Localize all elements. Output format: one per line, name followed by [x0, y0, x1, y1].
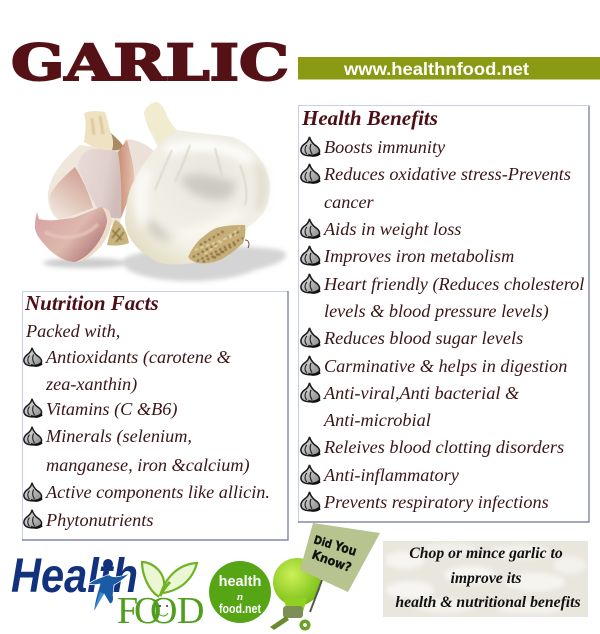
text: nutrition list	[24, 321, 270, 530]
text: benefits list: Releives blood clotting disorders	[323, 437, 564, 457]
text: benefits list	[301, 137, 584, 512]
logo badge: health n food.net	[209, 561, 271, 623]
logo badge: health n food.net: health	[219, 574, 261, 590]
text: nutrition list: Antioxidants (carotene &	[45, 347, 232, 368]
text: benefits list: cancer	[324, 192, 375, 212]
icon: light bulb with did you know sign	[270, 523, 380, 630]
text: nutrition list: Packed with,	[25, 321, 120, 341]
text: benefits list: Prevents respiratory infections	[323, 492, 549, 512]
heading: nutrition facts: Nutrition Facts	[24, 291, 159, 315]
callout: chop or mince tip: health & nutritional benefits	[395, 594, 581, 611]
callout: chop or mince tip	[383, 541, 588, 617]
callout: chop or mince tip: improve its	[450, 570, 522, 587]
icon: light bulb with did you know sign: Did You	[312, 532, 358, 560]
text: benefits list: Heart friendly (Reduces cholesterol	[323, 274, 584, 295]
text: benefits list: Anti-inflammatory	[323, 465, 460, 485]
panel: nutrition facts	[22, 291, 288, 540]
text: nutrition list: Phytonutrients	[45, 510, 153, 530]
heading: health benefits: Health Benefits	[301, 106, 438, 130]
website banner: www.healthnfood.net	[343, 59, 529, 79]
text: benefits list: Boosts immunity	[324, 137, 446, 157]
text: benefits list: Carminative & helps in digestion	[324, 356, 567, 376]
callout: chop or mince tip: Chop or mince garlic to	[409, 545, 563, 562]
logo badge: health n food.net: food.net	[219, 601, 262, 616]
text: benefits list: Anti-microbial	[323, 410, 431, 430]
text: nutrition list: Active components like allicin.	[45, 482, 270, 502]
text: benefits list: Reduces oxidative stress-Prevents	[323, 164, 571, 184]
text: benefits list: Anti-viral,Anti bacterial &	[323, 383, 520, 403]
text: nutrition list: manganese, iron &calcium)	[46, 455, 250, 476]
text: benefits list: Improves iron metabolism	[323, 246, 514, 266]
title: GARLIC	[11, 33, 289, 92]
icon: light bulb with did you know sign: Know?	[310, 547, 354, 575]
logo badge: health n food.net: n	[237, 591, 243, 603]
text: nutrition list: Vitamins (C &B6)	[46, 399, 177, 420]
text: nutrition list: Minerals (selenium,	[45, 426, 192, 447]
logo: health food	[11, 550, 204, 632]
logo: health food: FOOD	[117, 590, 204, 632]
garlic photo illustration	[35, 102, 286, 281]
website banner	[298, 57, 600, 80]
text: benefits list: Reduces blood sugar levels	[323, 328, 523, 348]
text: nutrition list: zea-xanthin)	[45, 374, 137, 395]
panel: health benefits	[298, 106, 589, 522]
logo: health food: Health	[11, 550, 138, 603]
text: benefits list: Aids in weight loss	[323, 219, 461, 239]
text: benefits list: levels & blood pressure levels)	[324, 301, 549, 322]
